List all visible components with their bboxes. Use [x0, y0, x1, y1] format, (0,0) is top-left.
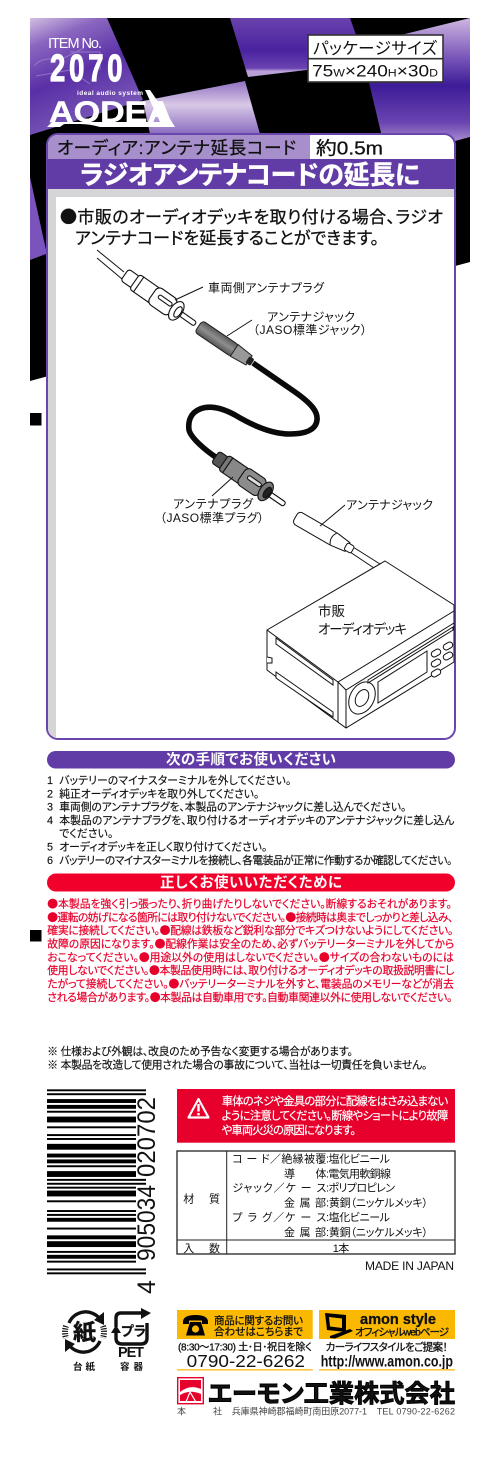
caution heading: 正しくお使いいただくために: [160, 874, 342, 892]
steps list: オーディオデッキを正しく取り付けてください。: [59, 840, 267, 854]
specifications table: 材: [183, 1192, 194, 1206]
contact: telephone panel: [177, 1310, 313, 1371]
barcode digits: 020702: [133, 1097, 161, 1177]
steps list: でください。: [59, 827, 113, 840]
contact: amon style web panel: amon style: [360, 1312, 436, 1328]
AODEA brand logo: AODEA: [49, 96, 172, 129]
extension cable: [189, 363, 317, 458]
label: vehicle plug: 車両側アンテナプラグ: [208, 281, 325, 295]
product name row: 約0.5m: [316, 138, 383, 158]
item number: 2070: [50, 48, 126, 90]
label: antenna jack JASO: アンテナジャック: [267, 310, 355, 324]
vehicle side antenna plug illustration: [97, 250, 201, 333]
item number: ITEM No.: [48, 36, 102, 52]
main product panel: [47, 134, 455, 739]
warning box: 車体のネジや金具の部分に配線をはさみ込まない: [222, 1094, 448, 1108]
caution text: たがって接続してください。●バッテリーターミナルを外すと、電装品のメモリーなどが消去: [47, 976, 454, 992]
label: antenna plug JASO: アンテナプラグ: [173, 497, 254, 511]
contact: telephone panel: (8:30～17:30) 土･日･祝日を除く: [178, 1340, 312, 1354]
icon: telephone: [183, 1315, 208, 1336]
recycling captions: [73, 1361, 143, 1373]
section: usage steps: [47, 750, 455, 867]
icon: plastic PET recycling mark: [111, 1308, 151, 1361]
company address: 社: [213, 1406, 222, 1417]
package size box: [308, 35, 443, 82]
headline band: ラジオアンテナコードの延長に: [80, 160, 420, 190]
caution text: ●本製品を強く引っ張ったり、折り曲げたりしないでください。断線するおそれがあります。: [47, 896, 452, 912]
specifications table: :塩化ビニール: [326, 1210, 390, 1224]
steps list: 2: [47, 788, 53, 800]
steps list: 1: [47, 775, 53, 787]
company address: 兵庫県神崎郡福崎町南田原2077-1: [232, 1406, 367, 1417]
specifications table: ジャック／ケ ー ス: [232, 1182, 326, 1195]
icon: paper recycling mark: [65, 1312, 104, 1352]
package size box: 75W×240 H×30 D: [312, 62, 438, 80]
barcode bars: [47, 1089, 146, 1274]
label: commercial audio deck: 市販: [318, 604, 345, 619]
icon: plastic PET recycling mark: PET: [118, 1345, 144, 1361]
specifications table: :ポリプロピレン: [326, 1182, 396, 1195]
caution text: される場合があります。●本製品は自動車用です。自動車関連以外に使用しないでください。: [47, 989, 452, 1005]
company address: [177, 1406, 455, 1417]
description text: アンテナコードを延長することができます。: [75, 229, 379, 248]
notes: ※ 仕様および外観は、改良のため予告なく変更する場合があります。: [47, 1044, 353, 1058]
contact: amon style web panel: カーライフスタイルをご提案！: [326, 1340, 448, 1354]
specifications table: 導: [284, 1166, 295, 1180]
recycling captions: 台紙: [73, 1361, 95, 1373]
company address: TEL 0790-22-6262: [377, 1407, 455, 1417]
specifications table: プ ラ グ／ケ ー ス: [232, 1210, 326, 1224]
icon: computer: [325, 1313, 353, 1338]
specifications table: :塩化ビニール: [326, 1151, 390, 1165]
section: correct use cautions: [47, 874, 455, 1005]
steps heading: [47, 750, 455, 768]
steps list: 純正オーディオデッキを取り外してください。: [59, 786, 259, 800]
label: vehicle plug: [175, 281, 325, 300]
specifications table: 質: [209, 1192, 220, 1206]
specifications table: 金 属 部: [284, 1226, 326, 1239]
steps list: 3: [47, 802, 53, 814]
steps list: [47, 774, 455, 867]
label: deck jack: [320, 498, 433, 526]
product name row: オーディア:アンテナ延長コード: [57, 138, 296, 158]
caution text: 故障の原因になります。●配線作業は安全のため、必ずバッテリーターミナルを外してから: [47, 936, 454, 952]
specifications table: 入: [183, 1243, 194, 1255]
barcode digits: 4: [133, 1280, 161, 1294]
specifications table: 体: [316, 1166, 326, 1180]
company address: 本: [177, 1406, 186, 1417]
steps list: 4: [47, 815, 53, 827]
contact: telephone panel: 商品に関するお問い: [214, 1314, 303, 1327]
registration mark lower: [30, 930, 42, 942]
registration mark upper: [30, 413, 42, 426]
steps list: バッテリーのマイナスターミナルを外してください。: [59, 774, 291, 787]
warning box: [177, 1089, 455, 1143]
notes: [47, 1044, 427, 1072]
specifications table: 数: [209, 1242, 220, 1255]
steps list: 車両側のアンテナプラグを、本製品のアンテナジャックに差し込んでください。: [59, 800, 406, 814]
label: commercial audio deck: [318, 604, 407, 637]
specifications table: 1本: [333, 1241, 349, 1255]
company logo mark: [178, 1378, 203, 1404]
label: deck jack: アンテナジャック: [346, 498, 433, 512]
specifications table: :電気用軟銅線: [326, 1166, 391, 1180]
notes: ※ 本製品を改造して使用された場合の事故について、当社は一切責任を負いません。: [47, 1058, 427, 1072]
label: commercial audio deck: オーディオデッキ: [318, 621, 407, 637]
label: antenna jack JASO: （JASO標準ジャック）: [253, 322, 367, 337]
contact: amon style web panel: [319, 1310, 455, 1371]
product antenna plug: [209, 448, 291, 513]
audio deck illustration: [267, 561, 454, 728]
caution text: [47, 896, 454, 1005]
header background: checkered purple and black: [30, 18, 470, 381]
package size box: パッケージサイズ: [313, 39, 437, 58]
contact: telephone panel: 0790-22-6262: [187, 1351, 305, 1371]
steps list: 5: [47, 842, 53, 854]
icon: warning triangle: [188, 1099, 208, 1118]
product antenna jack: [195, 321, 256, 368]
specifications table: 金 属 部: [284, 1197, 326, 1210]
contact: amon style web panel: http://www.amon.co.jp: [321, 1354, 453, 1371]
caution text: 確実に接続してください。●配線は鉄板など鋭利な部分でキズつけないようにしてください。: [47, 922, 453, 938]
icon: plastic PET recycling mark: プラ: [121, 1324, 146, 1339]
steps list: 6: [47, 855, 53, 867]
description text: [60, 203, 443, 248]
recycling captions: 容器: [120, 1361, 143, 1373]
specifications table: [177, 1151, 455, 1255]
specifications table: コ ー ド／絶縁被覆: [232, 1151, 326, 1165]
barcode digits: 905034: [133, 1185, 161, 1261]
warning box: や車両火災の原因になります。: [221, 1123, 356, 1137]
company name: エーモン工業株式会社: [208, 1380, 455, 1408]
contact: amon style web panel: オフィシャルwebページ: [355, 1327, 449, 1339]
steps heading: 次の手順でお使いください: [166, 750, 336, 768]
caution text: 使用しないでください。●本製品使用時には、取り付けるオーディオデッキの取扱説明書にし: [47, 962, 454, 978]
made in japan: MADE IN JAPAN: [365, 1259, 454, 1273]
grey inner frame: [48, 189, 454, 738]
caution heading: [47, 874, 455, 892]
caution text: ●運転の妨げになる箇所には取り付けないでください。●接続時は奥までしっかりと差し込み、: [47, 909, 453, 925]
caution text: おこなってください。●用途以外の使用はしないでください。●サイズの合わないものには: [47, 949, 454, 965]
label: antenna jack JASO: [227, 310, 367, 337]
warning box: ように注意してください。断線やショートにより故障: [222, 1108, 448, 1122]
product name row: [48, 135, 383, 159]
label: antenna plug JASO: [160, 477, 264, 525]
label: antenna plug JASO: （JASO標準プラグ）: [160, 510, 264, 525]
icon: paper recycling mark: 紙: [73, 1320, 96, 1345]
specifications table: :黄銅（ニッケルメッキ）: [326, 1225, 428, 1239]
steps list: バッテリーのマイナスターミナルを接続し、各電装品が正常に作動するか確認してください。: [59, 853, 452, 867]
steps list: 本製品のアンテナプラグを、取り付けるオーディオデッキのアンテナジャックに差し込ん: [59, 813, 455, 827]
description text: ●市販のオーディオデッキを取り付ける場合、ラジオ: [60, 203, 443, 228]
AODEA brand logo: ideal audio system: [77, 90, 143, 97]
barcode: [47, 1089, 161, 1294]
barcode digits: [133, 1097, 161, 1294]
contact: telephone panel: 合わせはこちらまで: [214, 1325, 303, 1338]
deck antenna jack: [292, 511, 380, 568]
specifications table: :黄銅（ニッケルメッキ）: [326, 1196, 428, 1210]
